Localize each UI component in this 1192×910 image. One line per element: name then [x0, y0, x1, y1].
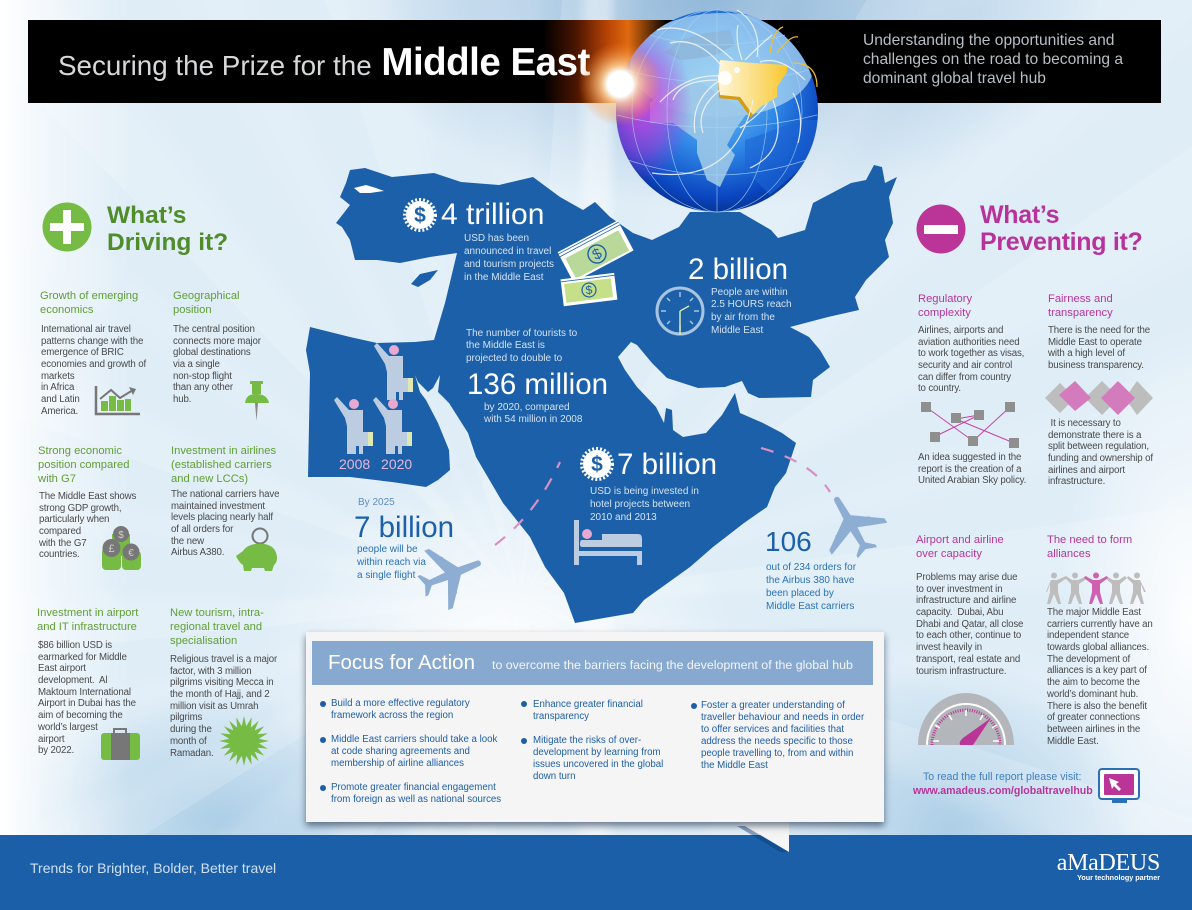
text: by air from the — [711, 312, 775, 323]
item: growth: Growth of emerging — [40, 290, 138, 302]
item: fairness: transparency — [1048, 307, 1113, 319]
subtitle: dominant global travel hub — [863, 70, 1046, 87]
text: growth: patterns change with the — [41, 336, 143, 347]
icon: linked people — [1046, 572, 1146, 606]
text: geography: The central position — [173, 324, 255, 335]
text — [331, 734, 497, 770]
text: airline investment: the new — [171, 536, 204, 547]
stat: 7 billion hotels — [580, 450, 780, 570]
text: fairness: business transparency. — [1048, 360, 1144, 371]
value: 7 billion — [354, 511, 454, 544]
text: alliances: of greater connections — [1047, 712, 1140, 723]
panel: what's preventing it — [913, 201, 1154, 803]
value: 2 billion — [688, 253, 788, 286]
map of the Middle East — [306, 165, 897, 623]
item: infrastructure: and IT infrastructure — [37, 621, 137, 633]
text — [464, 233, 554, 284]
text: Mitigate the risks of over- — [533, 735, 641, 746]
bullets: column 2 — [521, 697, 671, 787]
text: infrastructure: aim of becoming the — [38, 710, 123, 721]
icon: minus — [916, 204, 966, 254]
text: out of 234 orders for — [766, 562, 856, 573]
text: capacity: capacity. Dubai, Abu — [916, 607, 1003, 618]
text: airline investment: of all orders for — [171, 524, 233, 535]
text: People are within — [711, 286, 788, 298]
item: alliances — [1047, 534, 1132, 560]
icon: piggy bank — [236, 528, 277, 571]
subtitle: challenges on the road to becoming a — [863, 51, 1123, 68]
text: alliances: towards global alliances. — [1047, 642, 1149, 653]
heading — [107, 202, 228, 256]
text: visit prompt: To read the full report please visit: — [923, 771, 1081, 783]
text: Middle East carriers should take a look — [331, 734, 497, 745]
text: at code sharing agreements and — [331, 746, 470, 757]
text: sky policy — [918, 452, 1026, 486]
text: demonstrate: airlines and airport — [1048, 465, 1125, 476]
logo strapline: Your technology partner — [1077, 873, 1160, 882]
tagline: Trends for Brighter, Bolder, Better travel — [30, 860, 276, 876]
icon: coins: £ — [108, 543, 115, 555]
text: new tourism — [170, 654, 278, 758]
bullets: column 1 — [320, 697, 510, 812]
heading: Focus for Action — [328, 651, 475, 674]
text: alliances: carriers currently have an — [1047, 619, 1153, 630]
header band — [312, 641, 873, 685]
text: new tourism: during the — [170, 724, 212, 735]
text: capacity: Problems may arise due — [916, 572, 1017, 583]
text: 2010 and 2013 — [590, 512, 657, 523]
panel: focus for action — [306, 632, 884, 822]
logo: aMaDEUS — [1057, 850, 1160, 876]
footer — [0, 835, 1192, 910]
icon: banknotes: $ — [590, 245, 605, 264]
icon: banknotes: $ — [585, 283, 593, 297]
text: demonstrate: funding and ownership of — [1048, 453, 1153, 464]
text — [331, 782, 501, 806]
item: growth: economics — [40, 304, 93, 316]
text: infrastructure: airport — [38, 734, 64, 744]
item: fairness: Fairness and — [1048, 293, 1113, 305]
text — [766, 562, 856, 613]
icon: push pin — [245, 381, 269, 420]
text: By 2025 — [358, 497, 395, 508]
text: alliances: independent stance — [1047, 630, 1129, 641]
stat: 7 billion reach — [354, 497, 464, 587]
text: geography: non-stop flight — [173, 371, 232, 382]
text: membership of airline alliances — [331, 758, 464, 769]
item: new tourism: regional travel and — [170, 621, 262, 633]
text: fairness: Middle East to operate — [1048, 337, 1142, 348]
icon: plane right — [820, 495, 890, 557]
item: capacity — [916, 534, 1004, 560]
panel: map statistics — [300, 190, 900, 630]
value: 136 million — [467, 368, 608, 401]
text: Middle East — [711, 325, 763, 336]
text: infrastructure: earmarked for Middle — [38, 652, 127, 663]
value: 4 trillion — [441, 198, 544, 231]
subtitle — [863, 32, 1124, 87]
text: demonstrate: demonstrate there is a — [1048, 430, 1141, 441]
text: new tourism: month of — [170, 736, 207, 747]
text: hotel projects between — [590, 499, 690, 510]
text: by 2020, compared — [484, 402, 570, 412]
item: new tourism: New tourism, intra- — [170, 607, 264, 619]
heading — [980, 201, 1142, 256]
text: alliances: The major Middle East — [1047, 607, 1141, 618]
text: economic position: The Middle East shows — [39, 491, 136, 502]
text: geography: hub. — [173, 394, 191, 405]
text: USD has been — [464, 233, 529, 244]
text: sky policy: report is the creation of a — [918, 464, 1021, 475]
text — [331, 698, 470, 722]
text: announced in travel — [464, 246, 551, 257]
icon: plane left — [420, 543, 486, 611]
text: alliances: world’s dominant hub. — [1047, 689, 1138, 700]
text: regulatory — [918, 325, 1024, 394]
item: new tourism — [170, 607, 264, 647]
icon: clock — [655, 286, 705, 336]
text: infrastructure — [38, 640, 136, 756]
text — [533, 735, 663, 783]
text: the Middle East is — [466, 340, 545, 351]
text: been placed by — [766, 588, 834, 599]
text: people travelling to, from and within — [701, 748, 853, 759]
text: capacity — [916, 572, 1023, 676]
text: capacity: to each other, continue to — [916, 630, 1021, 641]
text: airline investment: levels placing nearly half — [171, 512, 273, 523]
text: transparency — [533, 711, 589, 722]
item: geography — [173, 290, 240, 316]
icon: dollar seal: $ — [591, 453, 603, 476]
text: url: www.amadeus.com/globaltravelhub — [913, 785, 1093, 797]
text — [590, 486, 699, 525]
icon group: travellers — [330, 340, 420, 455]
text: fairness: with a high level of — [1048, 348, 1125, 359]
text: regulatory: to work together as visas, — [918, 348, 1024, 359]
text: the Middle East — [701, 760, 768, 771]
text: the Airbus 380 have — [766, 575, 854, 586]
text: regulatory: to country. — [918, 383, 961, 394]
text: Promote greater financial engagement — [331, 782, 496, 793]
stat: 106 orders — [765, 525, 875, 615]
icon: chart — [94, 386, 140, 416]
heading: What’s — [107, 202, 186, 229]
text — [711, 286, 792, 338]
text: geography — [173, 324, 261, 405]
text: geography: than any other — [173, 382, 233, 393]
text — [357, 544, 426, 583]
icon: dollar seal: $ — [414, 204, 426, 227]
text: new tourism: million visit as Umrah — [170, 701, 258, 712]
text: Foster a greater understanding of — [701, 700, 845, 711]
text — [484, 402, 582, 427]
text: in the Middle East — [464, 272, 544, 283]
item: regulatory: Regulatory — [918, 293, 972, 305]
text: economic position: strong GDP growth, — [39, 503, 121, 514]
text: capacity: transport, real estate and — [916, 654, 1020, 665]
text: demonstrate: It is necessary to — [1051, 418, 1121, 429]
text: 2.5 HOURS reach — [711, 299, 792, 310]
icon: network — [921, 402, 1019, 448]
text: framework across the region — [331, 710, 453, 721]
icon: coins — [102, 526, 141, 570]
text: people will be — [357, 544, 418, 555]
text: regulatory: aviation authorities need — [918, 337, 1020, 348]
text: new tourism: the month of Hajj, and 2 — [170, 689, 270, 700]
text: infrastructure: Airport in Dubai has the — [38, 698, 136, 709]
route: dashed flight paths — [490, 455, 835, 550]
text: development by learning from — [533, 747, 661, 758]
text: growth: America. — [41, 406, 78, 417]
labels: years: 2008 2020 — [339, 456, 412, 472]
item: new tourism: specialisation — [170, 635, 237, 647]
item: economic position: position compared — [38, 459, 129, 471]
icon: monitor — [1097, 768, 1141, 806]
heading: What’s — [980, 201, 1059, 229]
text: growth: economies and growth of — [41, 359, 146, 370]
icon: bed — [574, 520, 644, 566]
text: demonstrate: infrastructure. — [1048, 476, 1105, 487]
text: report link — [913, 770, 1093, 798]
value: 7 billion — [617, 448, 717, 481]
text: economic position: countries. — [39, 549, 80, 560]
item: alliances: The need to form — [1047, 534, 1132, 546]
text: new tourism: Religious travel is a major — [170, 654, 277, 665]
stat: 136 million — [465, 325, 665, 435]
item: fairness — [1048, 293, 1113, 319]
item: growth — [40, 290, 138, 316]
text: airline investment: The national carriers have — [171, 489, 279, 500]
item: alliances: alliances — [1047, 548, 1091, 560]
text — [466, 328, 577, 366]
text: sky policy: An idea suggested in the — [918, 452, 1021, 463]
text: projected to double to — [466, 353, 562, 364]
text: new tourism: factor, with 3 million — [170, 666, 251, 677]
text: infrastructure: Maktoum International — [38, 687, 131, 698]
text: airline investment — [171, 489, 280, 558]
text: capacity: to over investment in — [916, 584, 1002, 595]
text: growth: markets — [41, 371, 74, 382]
panel tail — [735, 820, 791, 856]
text: down turn — [533, 771, 576, 782]
text: capacity: Dhabi and Qatar, all close — [916, 619, 1023, 630]
item: airline investment: (established carriers — [171, 459, 272, 471]
text: capacity: invest heavily in — [916, 642, 982, 653]
subtitle: Understanding the opportunities and — [863, 32, 1114, 49]
stat: 2 billion — [655, 253, 835, 343]
text: infrastructure: $86 billion USD is — [38, 640, 112, 651]
item: economic position — [38, 445, 129, 485]
text: growth: in Africa — [41, 382, 74, 393]
text: from foreign as well as national sources — [331, 794, 501, 805]
text: demonstrate: split between regulation, — [1048, 441, 1149, 452]
text: alliances: between airlines in the — [1047, 724, 1140, 735]
text: regulatory: Airlines, airports and — [918, 325, 1003, 336]
item: airline investment — [171, 445, 276, 485]
text: alliances: The development of — [1047, 654, 1130, 665]
icon: dollar seal — [402, 197, 438, 233]
icon: dollar seal — [579, 446, 615, 482]
text: alliances — [1047, 607, 1153, 747]
text: growth: International air travel — [41, 324, 131, 335]
text: with 54 million in 2008 — [484, 414, 582, 425]
text: fairness: There is the need for the — [1048, 325, 1150, 336]
text: infrastructure: development. Al — [38, 675, 107, 686]
text: within reach via — [357, 557, 426, 568]
text: economic position: compared — [39, 526, 81, 537]
text: Enhance greater financial — [533, 699, 643, 710]
item: capacity: Airport and airline — [916, 534, 1004, 546]
icon: coins: $ — [118, 530, 124, 541]
main title: Securing the Prize for the Middle East — [58, 41, 590, 84]
text: USD is being invested in — [590, 486, 699, 497]
icon: suitcase — [101, 728, 140, 760]
text: to offer services and facilities that — [701, 724, 844, 735]
subheading: to overcome the barriers facing the development of the global hub — [492, 658, 853, 672]
text: traveller behaviour and needs in order — [701, 712, 864, 723]
icon: gauge — [918, 693, 1014, 745]
text: geography: connects more major — [173, 336, 261, 347]
text: airline investment: Airbus A380. — [171, 547, 224, 558]
text: address the needs specific to those — [701, 736, 853, 747]
text: Middle East carriers — [766, 601, 854, 612]
item: capacity: over capacity — [916, 548, 982, 560]
text: alliances: There is also the benefit — [1047, 700, 1147, 712]
text: growth: and Latin — [41, 394, 80, 405]
text: issues uncovered in the global — [533, 759, 663, 770]
value: 106 — [765, 526, 812, 557]
text: fairness — [1048, 325, 1150, 371]
text: a single flight — [357, 570, 415, 581]
text: regulatory: security and air control — [918, 360, 1012, 371]
text: new tourism: Ramadan. — [170, 748, 214, 758]
text: economic position: with the G7 — [39, 538, 86, 549]
title banner — [28, 20, 1161, 103]
item: regulatory — [918, 293, 972, 319]
icon: sunburst — [219, 716, 269, 766]
text: geography: global destinations — [173, 347, 251, 358]
item: economic position: with G7 — [38, 473, 76, 485]
text: alliances: the aim to become the — [1047, 677, 1140, 688]
text: infrastructure: world’s largest — [38, 722, 98, 733]
text: capacity: infrastructure and airline — [916, 595, 1016, 606]
icon: diamonds — [1045, 381, 1153, 415]
text: and tourism projects — [464, 259, 554, 270]
bullets: column 3 — [691, 699, 871, 779]
text: new tourism: pilgrims — [170, 712, 202, 723]
text — [701, 700, 864, 772]
globe — [580, 10, 818, 212]
text: alliances: alliances is a key part of — [1047, 665, 1147, 676]
text: airline investment: maintained investment — [171, 501, 265, 512]
text: growth — [41, 324, 146, 417]
text: economic position: particularly when — [39, 514, 109, 525]
item: regulatory: complexity — [918, 307, 971, 319]
icon: banknotes — [560, 215, 640, 305]
panel: what's driving it — [37, 202, 280, 766]
item: airline investment: Investment in airlines — [171, 445, 276, 457]
text: regulatory: can differ from country — [918, 372, 1011, 383]
heading: Driving it? — [107, 229, 228, 256]
text: geography: via a single — [173, 359, 220, 370]
text: growth: emergence of BRIC — [41, 347, 124, 358]
text: infrastructure: East airport — [38, 663, 86, 674]
item: geography: position — [173, 304, 212, 316]
text: sky policy: United Arabian Sky policy. — [918, 475, 1026, 486]
text: demonstrate — [1048, 418, 1154, 487]
item: economic position: Strong economic — [38, 445, 122, 457]
item: airline investment: and new LCCs) — [171, 473, 248, 485]
text: alliances: Middle East. — [1047, 736, 1099, 747]
icon: plus — [42, 202, 92, 252]
text: Build a more effective regulatory — [331, 698, 470, 709]
text: economic position — [39, 491, 136, 560]
stat: 4 trillion — [400, 198, 650, 288]
text: The number of tourists to — [466, 328, 577, 338]
item: infrastructure — [37, 607, 138, 633]
text: infrastructure: by 2022. — [38, 745, 74, 756]
text: capacity: tourism infrastructure. — [916, 666, 1006, 676]
heading: Preventing it? — [980, 228, 1142, 256]
icon: coins: € — [128, 548, 134, 559]
text — [533, 699, 643, 723]
text: new tourism: pilgrims visiting Mecca in — [170, 677, 274, 688]
item: geography: Geographical — [173, 290, 240, 302]
item: infrastructure: Investment in airport — [37, 607, 138, 619]
